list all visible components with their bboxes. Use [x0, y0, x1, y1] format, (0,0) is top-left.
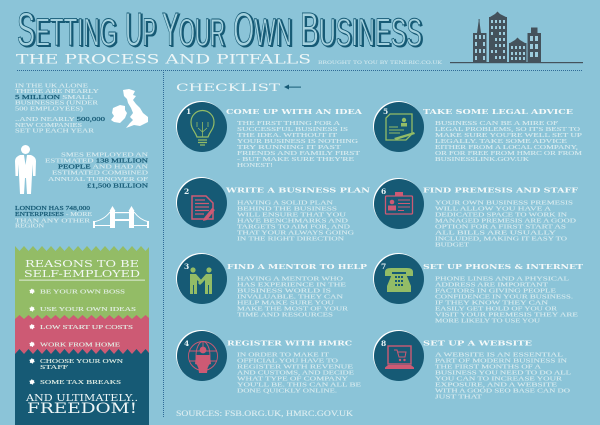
checklist item 4: YOU'LL BE. THIS CAN ALL BE — [237, 383, 361, 389]
stat: UK small businesses: THERE ARE NEARLY — [15, 89, 100, 95]
title: OWN — [233, 2, 292, 56]
checklist item 1: SUCCESSFUL BUSINESS IS — [237, 127, 349, 133]
checklist item 1: 1 — [186, 107, 191, 116]
checklist item 6: DEDICATED SPACE TO WORK IN — [435, 212, 568, 218]
checklist item 6: FIND PREMESIS AND STAFF — [423, 186, 578, 194]
checklist item 5: TAKE SOME LEGAL ADVICE — [423, 108, 573, 116]
stat: London enterprises: ENTERPRISES - MORE — [15, 212, 92, 218]
title: UP — [127, 4, 158, 56]
title: YOUR — [164, 4, 227, 56]
stat: UK small businesses: BUSINESSES (UNDER — [15, 100, 99, 107]
checklist item 3 — [176, 253, 367, 318]
checklist item 7: VISIT YOUR PREMESIS THEY ARE — [435, 312, 578, 318]
panel: reasons to be self-employed — [15, 246, 149, 425]
checklist item 8: SET UP A WEBSITE — [423, 340, 532, 348]
title — [17, 2, 424, 56]
checklist item 6: ALL BILLS ARE USUALLY — [435, 230, 557, 236]
checklist item 8: EXPOSURE, AND A WEBSITE — [435, 383, 557, 389]
checklist item 8: A WEBSITE IS AN ESSENTIAL — [435, 353, 563, 359]
reasons list: STAFF — [40, 364, 69, 371]
checklist item 5: MAKE SURE YOU'RE WELL SET UP — [435, 133, 583, 139]
checklist item 6: MANAGED PREMESIS ARE A GOOD — [435, 218, 577, 224]
checklist item 6 — [373, 178, 578, 248]
checklist item 7: CONFIDENCE IN YOUR BUSINESS. — [435, 294, 574, 300]
checklist item 5: OR FOR FREE FROM HMRC OR FROM — [435, 151, 583, 157]
checklist item 4: 4 — [184, 339, 189, 348]
heading: checklist: CHECKLIST — [176, 82, 280, 94]
stat: London enterprises: THAN ANY OTHER — [15, 218, 91, 224]
checklist item 1 — [176, 101, 363, 169]
checklist item 2 — [176, 177, 370, 242]
stat: SMEs employment: £1,500 BILLION — [87, 183, 149, 189]
checklist item 6: YOUR OWN BUSINESS PREMESIS — [435, 200, 574, 206]
checklist item 6: INCLUDED, MAKING IT EASY TO — [435, 236, 568, 242]
reasons list: CHOOSE YOUR OWN — [40, 358, 123, 365]
checklist item 1: YOUR BUSINESS IS NOTHING — [237, 139, 359, 145]
title: OWN — [235, 4, 294, 56]
stat: UK small businesses: SET UP EACH YEAR — [15, 128, 95, 134]
checklist item 7 — [373, 253, 583, 324]
checklist item 2: BEHIND THE BUSINESS — [237, 206, 338, 212]
icon: document and pencil — [192, 196, 215, 221]
stat: UK small businesses: ..AND NEARLY 500,000 — [15, 117, 105, 123]
checklist item 7: ADDRESS ARE IMPORTANT — [435, 282, 548, 288]
checklist item 2: 2 — [184, 187, 189, 196]
icon: handshake — [190, 267, 212, 294]
closing statement — [25, 394, 138, 417]
arrow — [284, 84, 301, 90]
icon: UK map — [111, 89, 148, 128]
checklist item 3: HAVING A MENTOR WHO — [237, 276, 344, 282]
checklist item 8 — [373, 330, 571, 401]
checklist item 8: 8 — [381, 339, 386, 348]
stat: SMEs employment — [45, 153, 149, 189]
closing statement: AND ULTIMATELY.. — [25, 394, 138, 404]
panel heading: SELF-EMPLOYED — [24, 269, 140, 280]
reasons list — [30, 288, 137, 386]
checklist item 7: PHONE LINES AND A PHYSICAL — [435, 276, 569, 282]
checklist item 3: TIME AND RESOURCES — [237, 312, 334, 318]
checklist item 1: HONEST! — [237, 163, 273, 169]
checklist item 3: BUSINESS WORLD IS — [237, 288, 332, 294]
checklist item 6: OPTION FOR A FIRST START AS — [435, 224, 567, 230]
checklist item 4: OFFICIAL YOU HAVE TO — [237, 359, 339, 365]
reasons list: WORK FROM HOME — [40, 342, 120, 348]
checklist item 7: FACTORS IN GIVING PEOPLE — [435, 288, 556, 294]
checklist item 5: LEGAL PROBLEMS, SO IT'S BEST TO — [435, 127, 581, 133]
checklist item 1: COME UP WITH AN IDEA — [226, 108, 363, 116]
checklist item 2: HAVING A SOLID PLAN — [237, 200, 334, 206]
checklist item 8: WITH A GOOD SEO BASE CAN DO — [435, 389, 571, 395]
checklist item 2: WILL ENSURE THAT YOU — [237, 212, 347, 218]
checklist item 8: JUST THAT — [435, 395, 482, 401]
checklist item 3: MAKE THE MOST OF YOUR — [237, 306, 349, 312]
checklist item 8: YOU CAN TO INCREASE YOUR — [435, 377, 563, 383]
stat: SMEs employment: ESTIMATED 138 MILLION — [45, 159, 149, 165]
checklist item 1: TRY RUNNING IT PAST — [237, 145, 341, 151]
checklist item 8: BUSINESS YOU NEED TO DO ALL — [435, 371, 571, 377]
icon: laptop with cart — [385, 346, 414, 369]
checklist item 2: IN THE RIGHT DIRECTION — [237, 236, 345, 242]
checklist item 6: 6 — [381, 187, 386, 196]
checklist item 2: THAT YOUR ALWAYS GOING — [237, 230, 355, 236]
icon: global person — [188, 341, 218, 373]
reasons list: BE YOUR OWN BOSS — [40, 288, 126, 296]
credit line: BROUGHT TO YOU BY TENERIC.CO.UK — [318, 60, 443, 66]
stat: UK small businesses: IN THE UK ALONE — [15, 83, 88, 89]
icon: ID badge — [386, 192, 412, 214]
checklist item 2: TARGETS TO AIM FOR, AND — [237, 224, 351, 230]
icon: Tower Bridge — [93, 206, 149, 228]
stat: London enterprises: REGION — [15, 224, 45, 230]
checklist item 8: PART OF MODERN BUSINESS IN — [435, 359, 568, 365]
checklist item 7: MORE LIKELY TO USE YOU — [435, 318, 541, 324]
checklist item 8: THE FIRST MONTHS OF A — [435, 365, 542, 371]
subtitle: THE PROCESS AND PITFALLS — [16, 52, 311, 68]
icon: telephone — [385, 268, 413, 292]
checklist item 3: HAS EXPERIENCE IN THE — [237, 282, 346, 288]
checklist item 4: DONE QUICKLY ONLINE. — [237, 389, 338, 395]
stat: SMEs employment: ESTIMATED COMBINED — [52, 171, 149, 177]
checklist item 2: HAVE BENCHMARKS AND — [237, 218, 349, 224]
stat: UK small businesses: 500 EMPLOYEES) — [15, 105, 83, 112]
checklist item 3: INVALUABLE. THEY CAN — [237, 294, 344, 300]
checklist item 7: IF THEY KNOW THEY CAN — [435, 300, 549, 306]
checklist item 5: BUSINESSLINK.GOV.UK — [435, 157, 530, 163]
reasons list: USE YOUR OWN IDEAS — [40, 306, 137, 313]
title: UP — [125, 2, 156, 56]
checklist item 4: WHAT TYPE OF COMPANY — [237, 377, 349, 383]
stat: London enterprises — [15, 206, 92, 230]
title: YOUR — [162, 2, 225, 56]
checklist item 2: WRITE A BUSINESS PLAN — [225, 186, 370, 194]
checklist item 4: REGISTER WITH HMRC — [227, 340, 353, 348]
stat: UK small businesses: NEW COMPANIES — [15, 123, 83, 129]
panel heading: REASONS TO BE — [25, 259, 139, 270]
panel heading — [19, 259, 145, 280]
checklist item 7: EASILY GET HOLD OF YOU OR — [435, 306, 558, 312]
checklist item 5: LEGALLY. TAKE SOME ADVICE — [435, 139, 567, 145]
title: BUSINESS — [300, 2, 422, 56]
checklist item 3: HELP MAKE SURE YOU — [237, 300, 335, 306]
checklist item 3: FIND A MENTOR TO HELP — [227, 263, 367, 271]
icon: city skyline — [450, 12, 583, 63]
checklist item 1: THE IDEA. WITHOUT IT — [237, 133, 337, 139]
checklist item 5: BUSINESS CAN BE A MIRE OF — [435, 121, 559, 127]
stat: SMEs employment: ANNUAL TURNOVER OF — [48, 177, 149, 183]
icon: businessman — [15, 145, 36, 194]
checklist item 6: WILL ALLOW YOU HAVE A — [435, 206, 552, 212]
checklist item 7: SET UP PHONES & INTERNET — [423, 263, 583, 271]
reasons list: LOW START UP COSTS — [40, 324, 134, 331]
checklist item 1: - BUT MAKE SURE THEY'RE — [237, 157, 354, 163]
checklist item 7: 7 — [381, 262, 386, 271]
title: SETTING — [17, 2, 117, 56]
closing statement: FREEDOM! — [27, 401, 137, 417]
reasons list: SOME TAX BREAKS — [40, 379, 122, 386]
icon: legal document — [386, 114, 415, 140]
checklist item 1: FRIENDS AND FAMILY FIRST — [237, 151, 360, 157]
checklist item 5: EITHER FROM A LOCAL COMPANY, — [435, 145, 579, 151]
checklist item 4: REGISTER WITH REVENUE — [237, 365, 353, 371]
checklist item 4: AND CUSTOMS, AND DECIDE — [237, 371, 354, 377]
stat: SMEs employment: PEOPLE AND HAD AN — [58, 165, 149, 171]
checklist item 6: BUDGET — [435, 242, 469, 248]
stat: UK small businesses: 5 MILLION SMALL — [15, 95, 93, 101]
checklist item 1: THE FIRST THING FOR A — [237, 121, 341, 127]
heading: checklist — [176, 82, 301, 94]
stat: UK small businesses — [15, 83, 105, 134]
checklist item 5: 5 — [383, 107, 388, 116]
checklist item 4 — [176, 330, 361, 395]
title: BUSINESS — [302, 4, 424, 56]
checklist item 4: IN ORDER TO MAKE IT — [237, 353, 329, 359]
title: SETTING — [19, 4, 119, 56]
sources: SOURCES: FSB.ORG.UK, HMRC.GOV.UK — [176, 409, 353, 418]
checklist item 5 — [373, 101, 583, 163]
stat: London enterprises: LONDON HAS 748,000 — [15, 206, 90, 212]
checklist item 3: 3 — [184, 262, 189, 271]
stat: SMEs employment: SMES EMPLOYED AN — [61, 153, 149, 159]
icon: light bulb — [191, 110, 214, 145]
